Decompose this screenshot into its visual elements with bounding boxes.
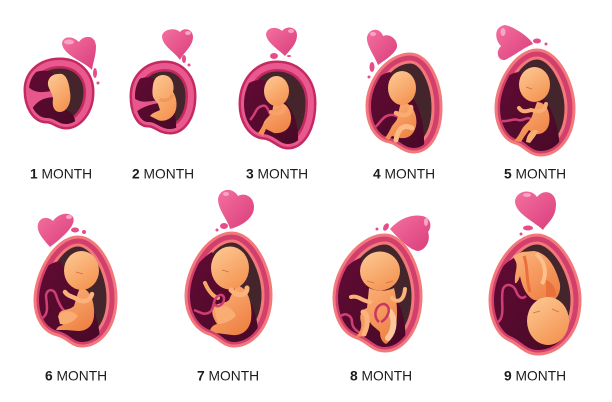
label: 2 month: 2 MONTH (132, 166, 194, 182)
umbilical cord month 9 (498, 285, 526, 322)
fetus month 5 (514, 67, 550, 143)
umbilical cord month 8 (341, 314, 362, 334)
fetus month 7 (205, 246, 251, 335)
label: 5 month: 5 MONTH (504, 166, 566, 182)
icon: heart month 1 (62, 37, 100, 84)
icon: heart month 7 (216, 190, 254, 232)
label: 4 month: 4 MONTH (373, 166, 435, 182)
umbilical cord month 3 (250, 106, 272, 120)
panel: month 8 (333, 216, 430, 355)
label: 9 month: 9 MONTH (504, 368, 566, 384)
panel: month 6 (34, 214, 112, 350)
panel: month 3 (240, 28, 311, 150)
fetus month 4 (385, 71, 416, 140)
label: 3 month: 3 MONTH (246, 166, 308, 182)
fetus month 3 (258, 76, 291, 136)
label: 8 month: 8 MONTH (350, 368, 412, 384)
uterus month 1 (25, 63, 89, 130)
uterus month 9 (490, 239, 576, 358)
umbilical cord month 1 (26, 84, 58, 110)
fetus month 8 (351, 252, 405, 344)
panel: month 9 (490, 192, 576, 358)
icon: heart month 5 (496, 25, 548, 60)
umbilical cord month 5 (502, 118, 532, 121)
label: 7 month: 7 MONTH (197, 368, 259, 384)
umbilical cord month 6 (42, 290, 72, 318)
uterus month 7 (185, 237, 267, 350)
umbilical cord month 4 (374, 115, 406, 128)
umbilical cord month 2 (132, 96, 165, 114)
panel: month 1 (25, 37, 100, 130)
uterus month 4 (365, 58, 437, 155)
panel: month 5 (495, 25, 570, 158)
umbilical cord month 7 (194, 295, 224, 314)
icon: heart month 4 (367, 30, 397, 78)
fetus month 6 (56, 251, 99, 331)
uterus month 6 (34, 241, 112, 350)
uterus month 8 (333, 239, 417, 355)
panel: month 2 (130, 29, 193, 135)
uterus month 5 (495, 54, 570, 158)
panel: month 7 (185, 190, 267, 350)
uterus month 2 (130, 66, 191, 135)
label: 1 month: 1 MONTH (30, 166, 92, 182)
icon: heart month 8 (376, 216, 430, 251)
icon: heart month 2 (162, 29, 193, 66)
fetus month 2 (150, 75, 177, 121)
fetus month 9 (513, 251, 569, 345)
uterus month 3 (240, 66, 311, 150)
icon: heart month 3 (266, 28, 297, 59)
label: 6 month: 6 MONTH (45, 368, 107, 384)
icon: heart month 9 (515, 192, 556, 236)
panel: month 4 (365, 30, 437, 155)
fetus month 1 (48, 74, 70, 112)
icon: heart month 6 (38, 214, 86, 247)
